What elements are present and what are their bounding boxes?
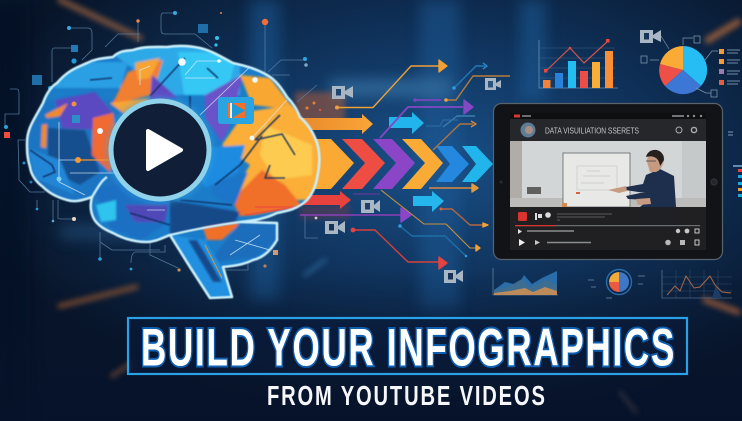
subtitle: FROM YOUTUBE VIDEOS (267, 381, 545, 412)
circuit nodes (4, 11, 321, 272)
brain light circuit traces (59, 61, 320, 278)
bar chart (539, 39, 618, 88)
brain base panels (27, 45, 322, 298)
donut gauge (588, 270, 645, 298)
main title: BUILD YOUR INFOGRAPHICS (141, 317, 674, 377)
icon: camera grey group (325, 30, 661, 283)
brain outline (27, 46, 319, 298)
player controls (510, 207, 706, 250)
connector arrows (300, 60, 510, 269)
pie legend (719, 49, 740, 85)
icon: camera (325, 221, 345, 234)
brain nodes (56, 58, 258, 182)
icon: video tile in brain (218, 97, 254, 124)
tablet (494, 104, 722, 260)
whiteboard (563, 153, 630, 207)
video player screen (510, 113, 706, 250)
icon: camera (444, 270, 463, 283)
icon: camera (361, 200, 380, 213)
side legend right of tablet (728, 132, 742, 197)
presenter (608, 150, 676, 230)
circuit lines around brain (5, 13, 318, 270)
title box (128, 317, 687, 377)
icon: play button (106, 96, 214, 204)
heat glow right of brain (295, 92, 345, 122)
brain (27, 45, 322, 298)
icon: camera (332, 86, 353, 99)
icon: camera (485, 78, 501, 90)
area chart (493, 268, 558, 295)
brain dark seams (30, 58, 295, 225)
pie chart (641, 36, 718, 97)
line chart (662, 270, 732, 298)
channel avatar (520, 122, 536, 138)
icon: camera (640, 30, 661, 43)
block arrows (300, 112, 444, 212)
video title: DATA VISUILIATION SSERETS (545, 126, 639, 136)
chevron arrows (305, 139, 493, 189)
video frame (510, 141, 706, 230)
